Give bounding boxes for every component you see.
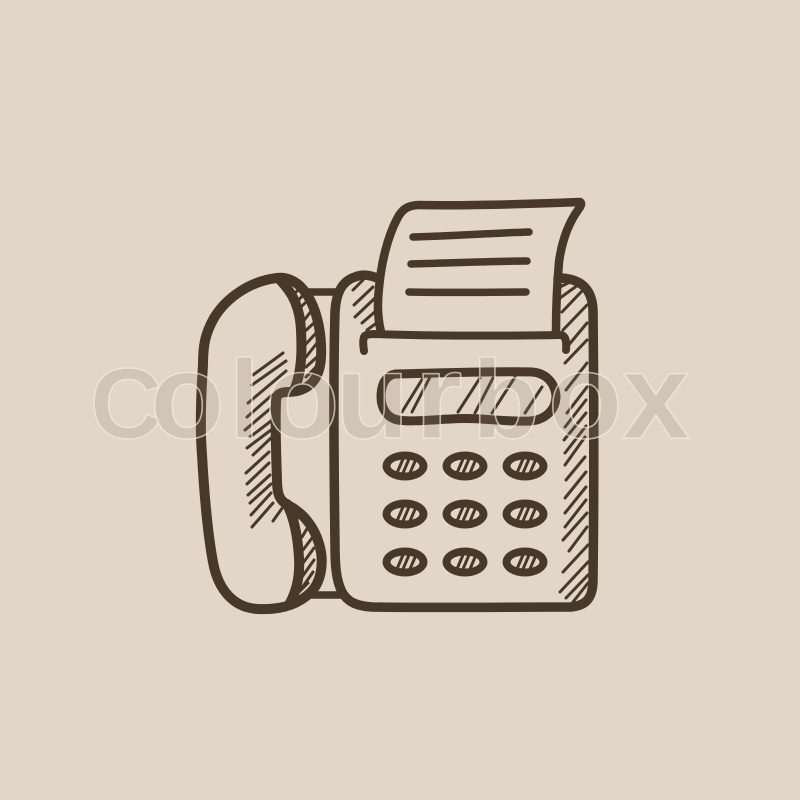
body shading hatching [353, 280, 588, 602]
key 9 [502, 548, 548, 576]
display outline [381, 372, 556, 421]
fax body outline [334, 275, 594, 607]
key 2 [442, 452, 488, 480]
watermark text: o [150, 328, 225, 464]
key 6 [502, 500, 548, 528]
watermark text: r [415, 328, 462, 464]
watermark text: b [472, 338, 540, 462]
key 8 [442, 548, 488, 576]
watermark text: C [90, 348, 162, 460]
key 3 [502, 452, 548, 480]
watermark text: o [265, 328, 340, 464]
telephone handset outline [201, 278, 322, 609]
key 4 [382, 500, 428, 528]
handset cradle connectors [308, 292, 342, 595]
display screen [381, 372, 556, 421]
watermark text: o [548, 328, 623, 464]
watermark text: x [622, 328, 690, 464]
display hatching [402, 377, 542, 413]
handset hatching [245, 288, 317, 593]
keypad [382, 452, 548, 576]
watermark text: u [335, 328, 410, 464]
paper text lines [409, 232, 529, 292]
icon: fax machine sketch [201, 202, 594, 609]
watermark text: l [229, 338, 260, 462]
paper sheet [378, 202, 581, 332]
key 7 [382, 548, 428, 576]
key 1 [382, 452, 428, 480]
paper slot shelf [363, 334, 566, 351]
key 5 [442, 500, 488, 528]
